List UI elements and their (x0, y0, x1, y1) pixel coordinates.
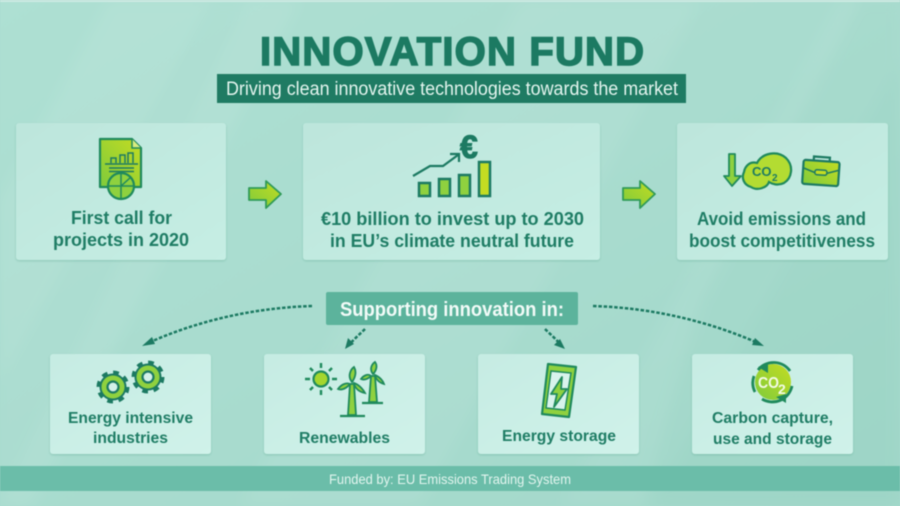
arrow: to energy intensive (142, 306, 312, 346)
text: 10 billion: in EU’s climate neutral future (330, 231, 574, 251)
arrow: first to second (249, 181, 281, 208)
text: avoid emissions: boost competitiveness (689, 231, 875, 251)
text: carbon capture: use and storage (713, 431, 832, 448)
text: energy storage: Energy storage (502, 428, 616, 445)
panel: first call (16, 123, 226, 260)
text: first call: projects in 2020 (53, 230, 189, 250)
arrow: to renewables (345, 329, 365, 349)
heading: supporting innovation (326, 292, 578, 325)
icon: co2 cycle: 2 (778, 381, 786, 397)
subtitle banner: Driving clean innovative technologies towards the market (226, 79, 679, 100)
icon: co2 cloud: 2 (772, 173, 778, 184)
text: first call: First call for (71, 208, 172, 228)
panel: energy storage (478, 354, 639, 454)
text: 10 billion: €10 billion to invest up to 2030 (321, 209, 584, 229)
text: energy intensive (68, 410, 193, 447)
arrow: to carbon capture (593, 306, 764, 346)
text: energy intensive: Energy intensive (68, 410, 193, 427)
icon: briefcase (802, 156, 840, 186)
text: energy intensive: industries (93, 430, 168, 447)
text: avoid emissions (689, 209, 875, 251)
panel: 10 billion (303, 123, 600, 260)
text: carbon capture (712, 410, 833, 448)
panel: renewables (264, 354, 425, 454)
icon: document with charts (100, 139, 141, 199)
icon: rising bars and euro: € (460, 129, 478, 165)
footer bar: Funded by: EU Emissions Trading System (329, 471, 571, 487)
text: avoid emissions: Avoid emissions and (697, 209, 866, 229)
icon: co2 cloud (743, 153, 791, 189)
panel: avoid emissions (677, 123, 888, 260)
panel: carbon capture (692, 354, 853, 454)
icon: down arrow (724, 154, 741, 186)
heading: supporting innovation: Supporting innovation in: (340, 299, 564, 321)
arrow: to energy storage (545, 329, 565, 349)
icon: co2 cycle: CO (758, 375, 779, 392)
text: renewables: Renewables (299, 430, 390, 447)
arrow: second to third (623, 181, 655, 208)
icon: co2 cloud: CO (752, 164, 772, 179)
icon: wind turbines (338, 362, 384, 416)
text: 10 billion (321, 209, 584, 251)
text: first call (53, 208, 189, 250)
icon: sun (305, 363, 337, 395)
icon: co2 cycle (753, 362, 792, 403)
text: carbon capture: Carbon capture, (712, 410, 833, 427)
icon: rising bars and euro (413, 129, 490, 196)
panel: energy intensive industries (50, 354, 211, 454)
title: INNOVATION FUND (260, 30, 644, 74)
icon: gears (99, 363, 162, 401)
icon: battery phone (542, 364, 576, 417)
footer bar (0, 466, 900, 491)
subtitle banner (217, 74, 686, 103)
